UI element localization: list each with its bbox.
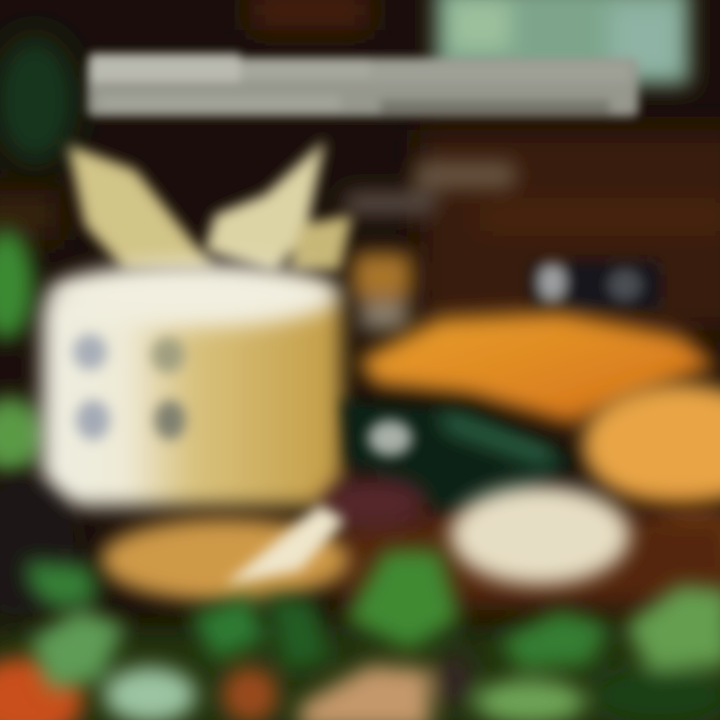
golden plate bbox=[100, 505, 350, 602]
background: wooden cabinet bbox=[0, 0, 720, 330]
lower tray shadow bbox=[340, 510, 720, 610]
title band, blurred and illegible bbox=[88, 54, 638, 116]
jar: spikes bbox=[68, 140, 352, 272]
jar: white rim bbox=[50, 263, 340, 327]
subtitle band, blurred bbox=[345, 162, 515, 214]
jar: body bbox=[42, 288, 342, 506]
bottom left carrot bbox=[0, 658, 83, 720]
bread: lower crust bbox=[650, 517, 720, 573]
jar: label spots bbox=[73, 334, 186, 440]
cucumber: label spot bbox=[368, 420, 412, 456]
jar of cream bbox=[42, 140, 412, 506]
left greens bbox=[0, 230, 44, 473]
plate: white streak bbox=[225, 505, 345, 585]
cucumber: highlight bbox=[440, 410, 560, 465]
dark avocado bbox=[0, 478, 80, 622]
cucumber bbox=[342, 400, 575, 510]
red onion bbox=[323, 477, 427, 529]
cucumber: dark skin bbox=[342, 400, 575, 510]
bottom foreground base bbox=[0, 625, 720, 720]
bread loaves bbox=[358, 312, 720, 573]
bread: upper loaf bbox=[358, 312, 718, 425]
jar: orange piece behind bbox=[352, 252, 412, 330]
white slice bbox=[450, 485, 630, 585]
dark label on cabinet bbox=[530, 262, 660, 310]
bottom vegetables bbox=[25, 550, 720, 720]
background: window bbox=[435, 0, 690, 85]
bread: right loaf bbox=[582, 383, 720, 507]
background: dark foliage bbox=[0, 35, 77, 165]
